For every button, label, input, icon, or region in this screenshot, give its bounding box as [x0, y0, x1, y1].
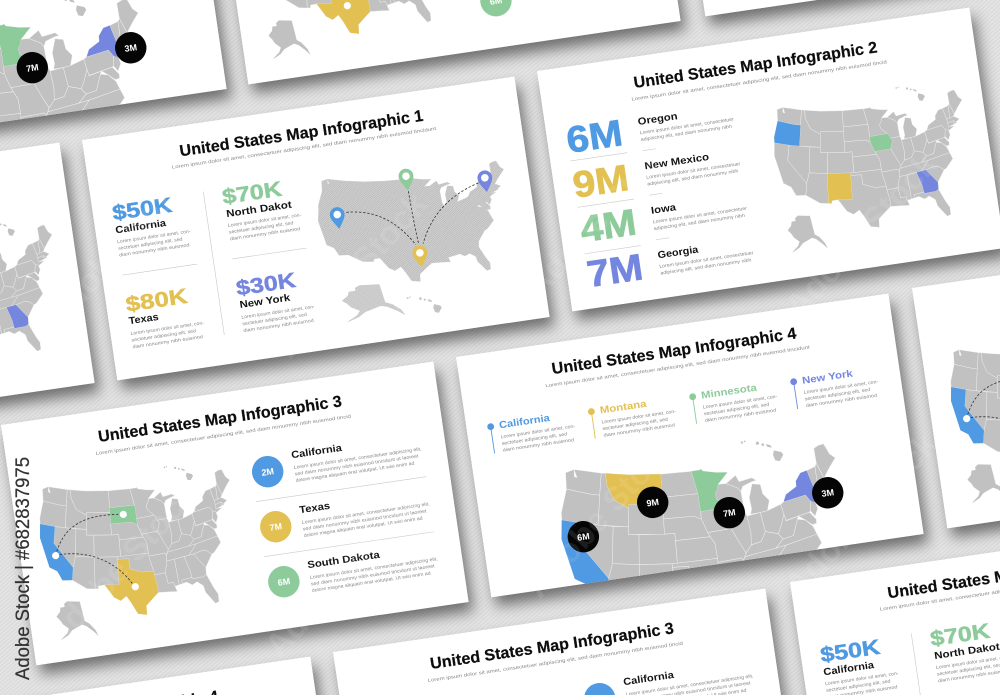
stat: California: diam nonummy nibh euismod [119, 242, 190, 258]
watermark: Adobe Stock repeats: Adobe Stock [778, 425, 945, 605]
map: large US map [561, 440, 836, 584]
row: Oregon: adipiscing elit, sed diam nonummy nibh [640, 124, 733, 142]
row: Texas: sed diam nonummy nibh euismod tincidunt ut laoreet [302, 508, 428, 531]
row: Iowa [578, 185, 750, 250]
badge: 3M: 3M [124, 42, 138, 54]
row: Oregon: Lorem ipsum dolor sit amet, consectetuer [639, 116, 735, 135]
row: South Dakota: sed diam nonummy nibh euismod tincidunt ut laoreet [311, 563, 436, 586]
item: New York [790, 365, 881, 410]
slide: bottom-left fragment [0, 657, 346, 695]
row: Texas: Lorem ipsum dolor sit amet, consectetuer adipiscing elit, [301, 501, 430, 525]
badge: 7M: 7M [722, 507, 736, 519]
map: dotted US [312, 154, 523, 328]
item: Montana: Lorem ipsum dolor sit amet, con- [601, 409, 677, 425]
row: Iowa: Iowa [650, 202, 677, 217]
pin: green [398, 168, 415, 192]
item: New York: New York [801, 368, 854, 387]
row: New Mexico [570, 141, 743, 206]
row: South Dakota: 6M [277, 576, 291, 588]
row: California [582, 658, 756, 695]
row: South Dakota: South Dakota [307, 550, 381, 571]
map: US with highlighted states [767, 78, 981, 254]
slide: top-center map fragment [213, 0, 681, 84]
watermark: Adobe Stock repeats: Adobe Stock [268, 185, 435, 365]
row: Iowa: 4M [578, 201, 639, 250]
item: Minnesota: diam nonummy nibh euismod [704, 407, 777, 423]
stat: New York: sectetuer adipiscing elit, sed [242, 312, 307, 326]
stat: California: sectetuer adipiscing elit, sed [118, 236, 183, 251]
row: Georgia: Georgia [657, 244, 700, 261]
stat: North Dakota: Lorem ipsum dolor sit amet, con- [228, 212, 302, 228]
row: California: Lorem ipsum dolor sit amet, consectetuer adipiscing elit, [293, 446, 422, 470]
row: Iowa: adipiscing elit, sed diam nonummy nibh [653, 213, 746, 231]
pin: blue [329, 206, 347, 230]
stat: North Dakota: diam nonummy nibh euismod [938, 668, 1000, 683]
subtitle: Lorem ipsum dolor sit amet, consectetuer adipiscing elit, sed diam nonummy nibh euismod tincid [427, 641, 684, 684]
title: United States Map Infographic 3 [429, 620, 675, 673]
slide: Infographic 4 [456, 294, 924, 598]
item: California: sectetuer adipiscing elit, sed [501, 431, 568, 446]
row: California: 2M [261, 466, 275, 478]
watermark: Adobe Stock repeats: Adobe Stock [38, 475, 205, 655]
stat: California: $50K [111, 194, 174, 225]
row: California [250, 431, 424, 489]
row: New Mexico: New Mexico [644, 152, 710, 172]
row: Oregon: Oregon [637, 111, 678, 128]
title: United States Map Infographic 1 [179, 108, 424, 160]
slide: Infographic 2 [537, 8, 1000, 311]
slide: top-left map fragment [0, 0, 227, 122]
badge: 9M [635, 485, 671, 520]
subtitle: Lorem ipsum dolor sit amet, consectetuer adipiscing elit, sed diam nonummy nibh euismod tincid [95, 414, 352, 457]
stat: Texas: Texas [128, 312, 160, 327]
item: New York: Lorem ipsum dolor sit amet, con- [803, 379, 879, 395]
row: South Dakota: Lorem ipsum dolor sit amet, consectetuer adipiscing elit, [310, 556, 438, 580]
slide: bottom-right fragment [790, 519, 1000, 695]
stat: California: sectetuer adipiscing elit, sed [826, 678, 891, 693]
title: United States Map Infographic 2 [633, 39, 879, 92]
stat: California: $50K [819, 636, 882, 667]
row: Oregon: 6M [564, 112, 625, 161]
badge: 6M [478, 0, 514, 18]
title: United States Map Infographic 3 [97, 393, 343, 446]
map: US with Georgia [0, 213, 69, 376]
item: California: California [498, 413, 551, 431]
item: Montana: sectetuer adipiscing elit, sed [602, 417, 669, 431]
item: New York: sectetuer adipiscing elit, sed [804, 387, 871, 401]
row: California: dolore magna aliquam erat volutpat. Ut wisi enim ad [295, 461, 415, 483]
stat: Texas: sectetuer adipiscing elit, sed [131, 328, 197, 343]
subtitle: Lorem ipsum dolor sit amet, consectetuer adipiscing elit, sed diam nonummy nibh euismod tincidunt [545, 344, 811, 389]
stat: New York: diam nonummy nibh euismod [243, 318, 314, 333]
item: Minnesota: sectetuer adipiscing elit, sed [704, 402, 770, 416]
badge: 6M [566, 519, 601, 555]
slide: Infographic 1 [82, 77, 550, 380]
subtitle: Lorem ipsum dolor sit amet, consectetuer adipiscing elit, sed diam nonummy nibh euismod tincidunt [172, 126, 437, 171]
stat: North Dakota: North Dakot [934, 641, 1000, 662]
row: New Mexico: 9M [570, 157, 631, 206]
stat: North Dakota: $70K [221, 178, 283, 209]
item: New York: diam nonummy nibh euismod [805, 393, 878, 408]
watermark: Adobe Stock repeats: Adobe Stock [518, 125, 685, 305]
row: Texas: 7M [269, 521, 283, 533]
stat: North Dakota: diam nonummy nibh euismod [230, 226, 301, 241]
row: Texas: dolore magna aliquam erat volutpat. Ut wisi enim ad [303, 516, 423, 538]
stat: California: Lorem ipsum dolor sit amet, con- [825, 670, 899, 686]
item: Minnesota: Lorem ipsum dolor sit amet, con- [703, 394, 778, 410]
watermark: Adobe Stock repeats: Adobe Stock [38, 155, 205, 335]
map: US with California [944, 324, 1000, 505]
stat: Texas [124, 283, 207, 349]
title: United States Map Infographic 4 [551, 325, 798, 378]
map: large US map [0, 0, 138, 122]
watermark: Adobe Stock repeats: Adobe Stock [778, 145, 945, 325]
stat: Texas: Lorem ipsum dolor sit amet, con- [130, 320, 205, 336]
stat: New York [235, 267, 317, 333]
row: Georgia: 7M [584, 246, 646, 295]
item: Montana: Montana [599, 399, 648, 417]
row: New Mexico: adipiscing elit, sed diam nonummy nibh [647, 168, 739, 187]
stat: New York: Lorem ipsum dolor sit amet, con- [241, 304, 315, 320]
item: California [487, 409, 578, 454]
slide: right map fragment [912, 225, 1000, 528]
item: California: Lorem ipsum dolor sit amet, con- [500, 423, 576, 439]
watermark: Adobe Stock repeats: Adobe Stock [258, 485, 425, 665]
row: South Dakota [266, 542, 440, 599]
stat: California: California [115, 218, 167, 236]
item: Minnesota: Minnesota [700, 383, 758, 402]
row: California: California [623, 670, 675, 688]
stat: North Dakota: sectetuer adipiscing elit, sed [937, 662, 1000, 677]
watermark: Adobe Stock repeats [38, 125, 945, 665]
route lines [345, 181, 486, 254]
badge: 3M [810, 475, 846, 511]
row: Georgia: Lorem ipsum dolor sit amet, consectetuer [659, 250, 754, 269]
stat: California: California [823, 660, 875, 678]
item: California: diam nonummy nibh euismod [502, 437, 575, 453]
stat: North Dakota: North Dakot [226, 199, 293, 220]
row: Georgia: adipiscing elit, sed diam nonummy nibh [660, 257, 752, 276]
badge: 6M: 6M [576, 531, 590, 543]
stock ID caption: Adobe Stock | #682837975 [13, 457, 34, 680]
slide: left map fragment [0, 143, 95, 446]
row: Oregon [564, 96, 737, 161]
row: Texas: Texas [299, 501, 331, 516]
stat: California [819, 634, 901, 695]
row: Texas [258, 486, 432, 544]
row: Iowa: Lorem ipsum dolor sit amet, consectetuer [652, 206, 748, 224]
badge: 7M [14, 50, 50, 85]
item: Montana: diam nonummy nibh euismod [603, 422, 676, 438]
pin: yellow [411, 244, 429, 268]
item: Minnesota [689, 380, 780, 425]
badge: 7M: 7M [25, 62, 39, 74]
stat: California [111, 192, 193, 258]
item: Montana [587, 395, 679, 440]
stat: New York: New York [239, 293, 291, 311]
stat: California: Lorem ipsum dolor sit amet, con- [117, 228, 191, 244]
stat: North Dakota [221, 175, 304, 242]
row: Georgia [584, 230, 756, 295]
badge: 3M: 3M [821, 487, 835, 499]
subtitle: Lorem ipsum dolor sit amet, consectetuer adipiscing elit, sed diam nonummy nibh euismod tincid [631, 59, 888, 103]
badge: 3M [113, 30, 149, 66]
badge: 7M [711, 495, 747, 530]
stat: New York: $30K [235, 269, 297, 300]
row: South Dakota: dolore magna aliquam erat volutpat. Ut wisi enim ad [311, 571, 431, 593]
slide: Infographic 3 [1, 362, 469, 665]
stat: North Dakota [929, 617, 1000, 684]
map: US with Texas [245, 0, 461, 61]
row: California: California [291, 443, 343, 461]
stat: North Dakota: sectetuer adipiscing elit, sed [229, 220, 294, 235]
row: New Mexico: Lorem ipsum dolor sit amet, consectetuer [646, 161, 741, 180]
stat: North Dakota: $70K [929, 620, 991, 651]
slide: bottom-center fragment [333, 589, 801, 695]
badge: 9M: 9M [646, 497, 660, 509]
pin: purple [476, 169, 494, 193]
map: US with California, Texas, South Dakota [32, 457, 249, 642]
slide: top-right blank card [670, 0, 1000, 16]
stat: Texas: $80K [124, 285, 189, 317]
row: California: sed diam nonummy nibh euismod tincidunt ut laoreet [294, 453, 420, 476]
stat: Texas: diam nonummy nibh euismod [132, 334, 204, 349]
watermark: Adobe Stock repeats: Adobe Stock [518, 425, 685, 605]
